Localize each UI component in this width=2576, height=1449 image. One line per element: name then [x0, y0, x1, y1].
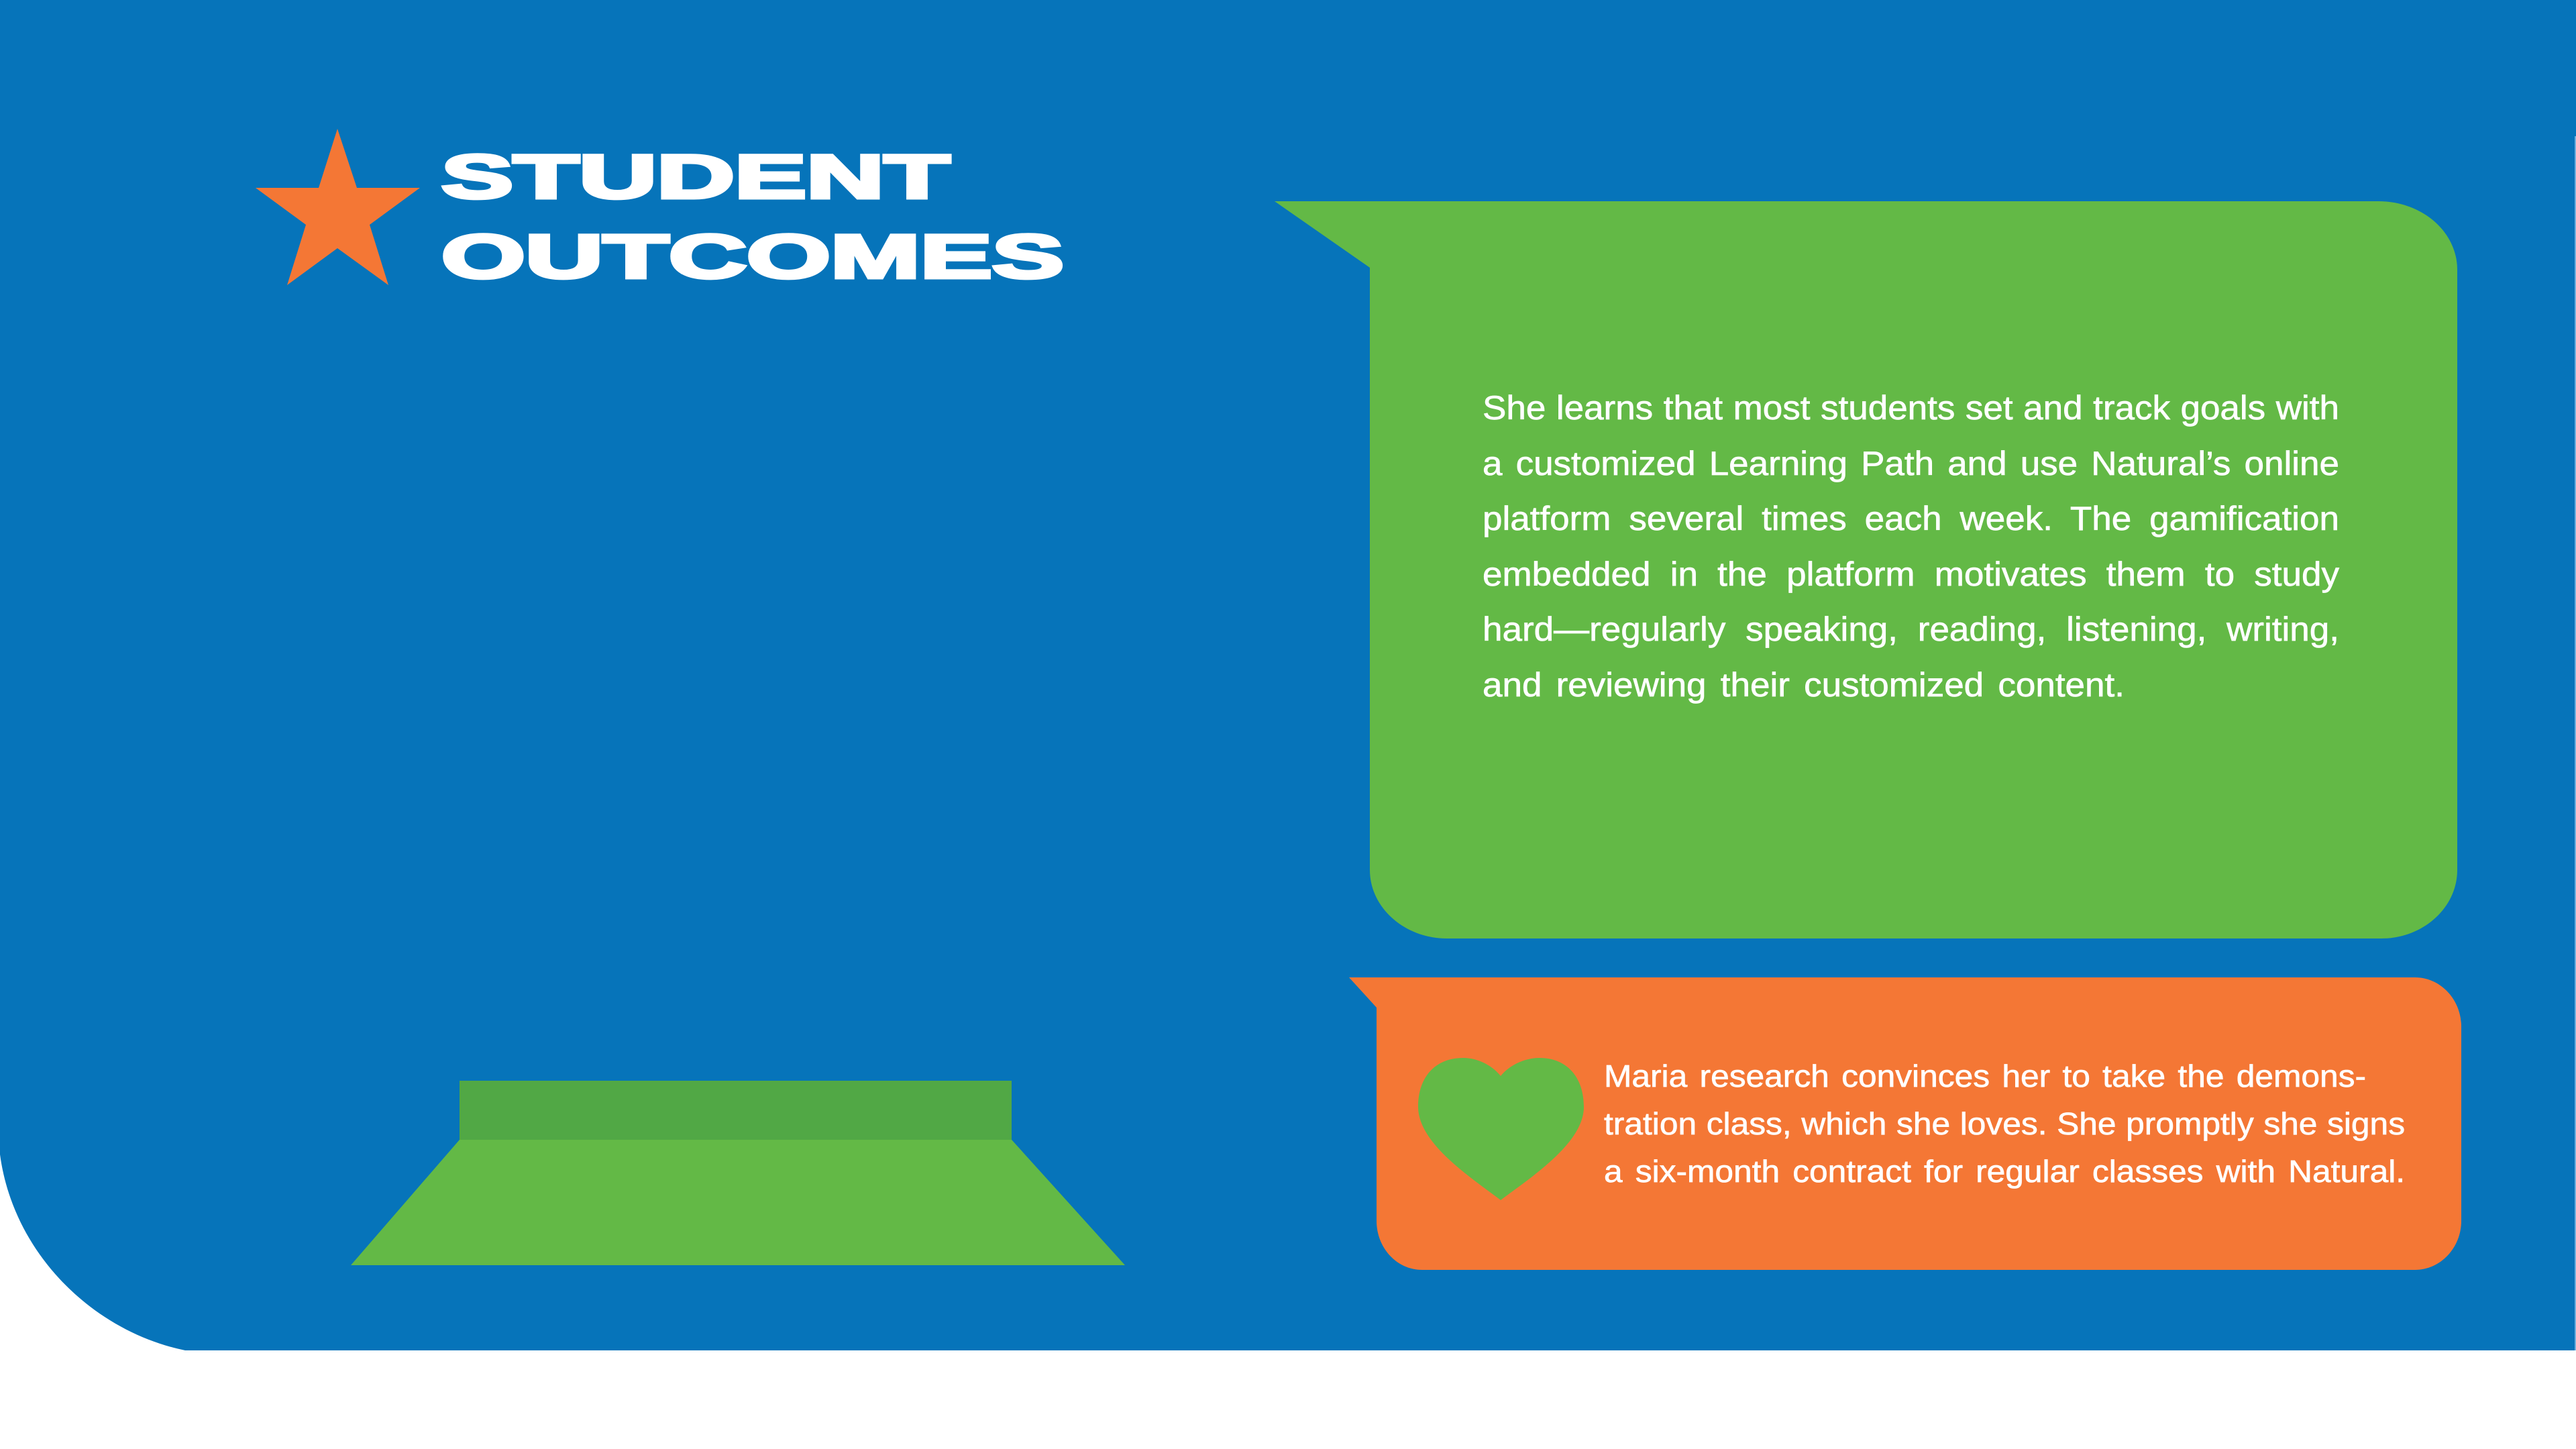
text block: demonstration class: a six-month contract for regular classes with Natural.: [1604, 1154, 2405, 1189]
text block: learning path: [1483, 389, 2340, 704]
text block: learning path: a customized Learning Path and use Natural’s online: [1483, 445, 2339, 482]
text block: demonstration class: tration class, which she loves. She promptly she signs: [1604, 1106, 2405, 1141]
text block: demonstration class: Maria research convinces her to take the demons-: [1604, 1059, 2366, 1093]
text block: learning path: hard—regularly speaking, reading, listening, writing,: [1483, 610, 2339, 648]
text block: learning path: and reviewing their customized content.: [1483, 666, 2125, 704]
text block: learning path: embedded in the platform motivates them to study: [1483, 555, 2339, 593]
text block: learning path: platform several times each week. The gamification: [1483, 500, 2339, 537]
title: OUTCOMES: [441, 223, 1064, 291]
text block: learning path: She learns that most students set and track goals with: [1483, 389, 2339, 427]
title: STUDENT: [441, 143, 950, 211]
text block: demonstration class: [1604, 1059, 2405, 1189]
